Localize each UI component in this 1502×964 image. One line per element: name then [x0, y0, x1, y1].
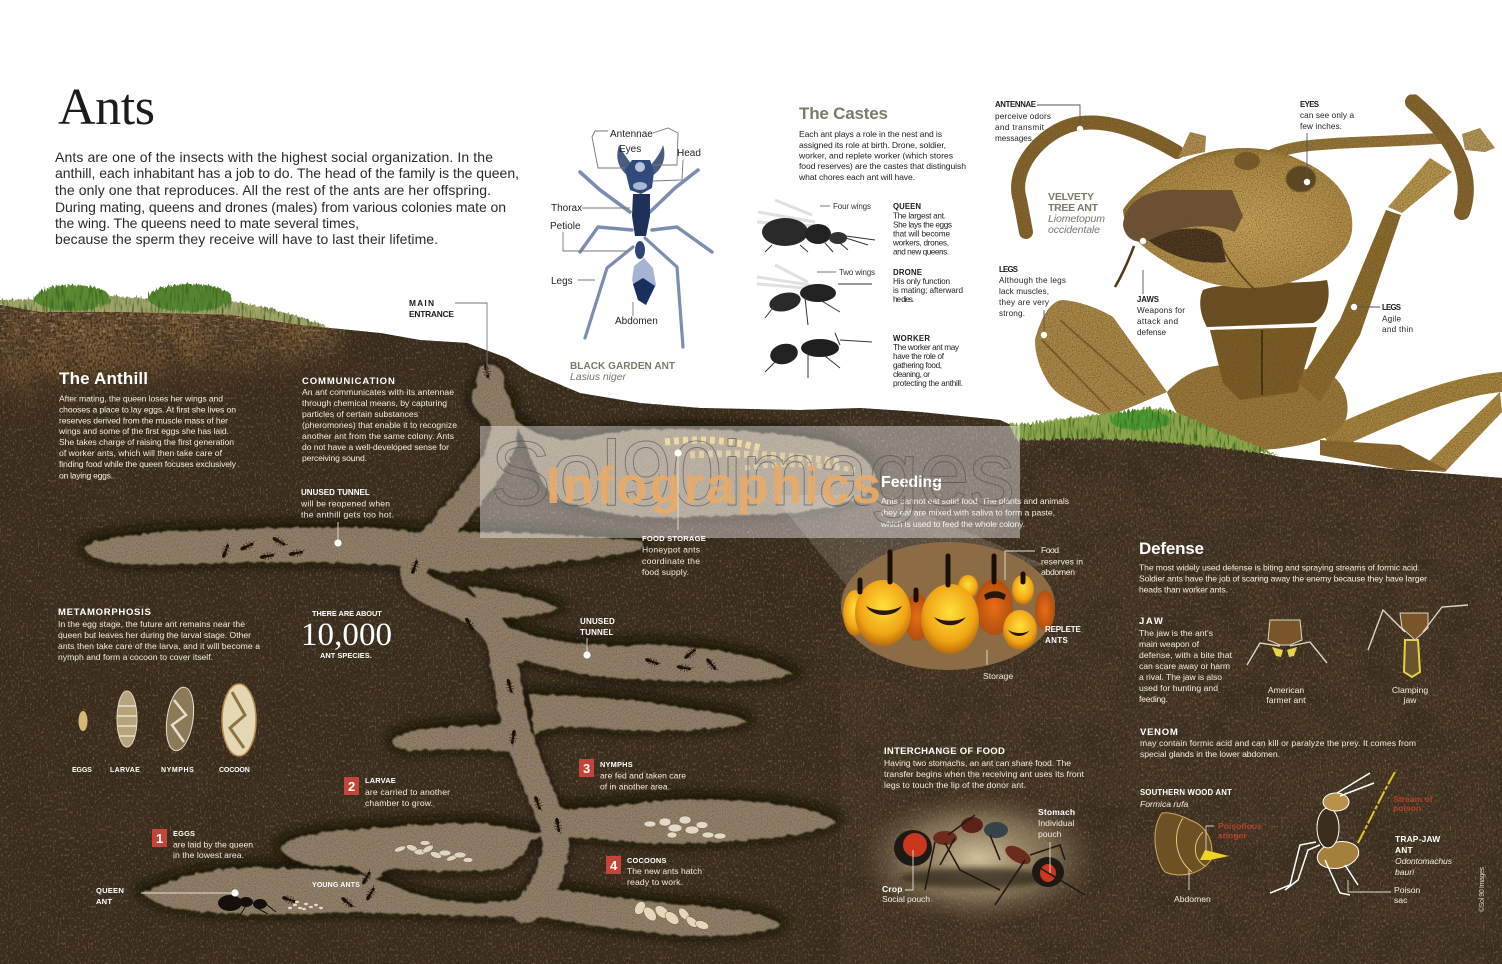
- caste labels: The worker ant may: [893, 343, 960, 352]
- raised leg: [1298, 210, 1401, 402]
- clamping jaw head: [1368, 605, 1468, 705]
- food storage label: coordinate the: [642, 556, 700, 566]
- big ant annotations: VELVETY: [1048, 191, 1094, 203]
- the anthill text: [58, 369, 237, 480]
- the anthill text: reserves derived from the muscle mass of her: [59, 416, 228, 426]
- step 3 nymphs: are fed and taken care: [600, 770, 686, 780]
- step 1 eggs: EGGS: [173, 829, 195, 838]
- ant part labels: Antennae: [610, 129, 653, 140]
- black garden ant caption: BLACK GARDEN ANT: [570, 361, 675, 372]
- replete ants labels: Storage: [983, 671, 1013, 681]
- big ant annotations: LEGS: [1382, 303, 1401, 312]
- caste labels: workers, drones,: [892, 238, 949, 248]
- crop and stomach labels: pouch: [1038, 829, 1062, 839]
- intro text: During mating, queens and drones (males) from various colonies mate on: [55, 199, 506, 215]
- venom text: VENOM: [1140, 727, 1178, 738]
- queen ant: [218, 895, 276, 915]
- southern wood ant: Poisonous: [1218, 821, 1262, 831]
- metamorphosis text: In the egg stage, the future ant remains near the: [58, 619, 245, 629]
- fine grain on tunnels: [0, 290, 1502, 964]
- step 1 eggs: are laid by the queen: [173, 840, 253, 850]
- 10,000 ant species stat: THERE ARE ABOUT: [312, 609, 382, 618]
- egg pile: [288, 901, 323, 910]
- ant heads: [860, 552, 1023, 600]
- big ant annotations: defense: [1137, 328, 1166, 337]
- young ants label: YOUNG ANTS: [312, 882, 360, 889]
- queen ant label: ANT: [96, 897, 112, 906]
- stage labels: COCOON: [219, 767, 250, 774]
- step 3 nymphs: [579, 759, 686, 792]
- replete ants close-up: [841, 542, 1055, 670]
- food storage pin: [674, 449, 682, 530]
- black garden ant caption: [570, 361, 675, 383]
- zoom wedge to replete ants: [772, 495, 1045, 590]
- nymph pile: [644, 816, 726, 839]
- caste labels: Four wings: [833, 202, 871, 211]
- folded foreleg: [1035, 300, 1167, 417]
- ant callout lines: [563, 128, 683, 316]
- ant part labels: Thorax: [551, 203, 582, 214]
- interchange of food text: transfer begins when the receiving ant uses its front: [884, 769, 1085, 779]
- caste labels: and new queens.: [893, 248, 949, 256]
- jaw text: JAW: [1139, 616, 1163, 627]
- big ant annotations: attack and: [1137, 317, 1178, 326]
- left ant: [894, 815, 1000, 890]
- right ant: [984, 822, 1085, 905]
- metamorphosis stages: [72, 684, 256, 774]
- 10,000 ant species stat: 10,000: [301, 617, 392, 653]
- jaw text: The jaw is the ant's: [1139, 628, 1213, 638]
- interchange of food photo: [853, 790, 1103, 926]
- replete ants labels: [983, 545, 1083, 681]
- communication text: An ant communicates with its antennae: [302, 387, 454, 397]
- big ant annotations: Agile: [1382, 314, 1401, 324]
- stinger label: [1206, 826, 1214, 852]
- communication text: do not have a well-developed sense for: [302, 442, 449, 452]
- crop and stomach labels: Social pouch: [882, 894, 930, 904]
- step 4 cocoons: ready to work.: [627, 877, 683, 887]
- main entrance label: MAIN: [409, 298, 434, 308]
- step 4 cocoons: COCOONS: [627, 856, 667, 865]
- step 2 larvae: 2: [348, 779, 355, 794]
- big ant annotations: LEGS: [999, 265, 1018, 274]
- main entrance label: ENTRANCE: [409, 309, 454, 319]
- intro text: [55, 149, 519, 247]
- stage labels: LARVAE: [110, 767, 140, 774]
- step 1 eggs: in the lowest area.: [173, 850, 244, 860]
- jaw text: [1139, 616, 1233, 704]
- american farmer ant head: farmer ant: [1266, 695, 1306, 705]
- nymph: [163, 686, 197, 752]
- caste labels: he dies.: [893, 295, 914, 304]
- head: [1123, 148, 1352, 288]
- larvae pile: [394, 840, 473, 862]
- queen ant photo: [757, 200, 875, 252]
- ant legs: [580, 170, 712, 347]
- grass: right patch: [1010, 408, 1278, 455]
- big ant annotations: [995, 100, 1413, 338]
- southern wood ant: Formica rufa: [1140, 799, 1188, 809]
- big ant annotations: EYES: [1300, 100, 1319, 109]
- venom text: special glands in the lower abdomen.: [1140, 749, 1280, 759]
- step 2 larvae: are carried to another: [365, 787, 450, 797]
- abdomen drawing: [1155, 813, 1229, 875]
- big ant annotations: and transmit: [995, 123, 1045, 132]
- soil ground with tunnels: [0, 290, 1502, 964]
- unused tunnel 2 label: TUNNEL: [580, 628, 614, 637]
- stage labels: NYMPHS: [161, 767, 194, 774]
- big ant annotations: occidentale: [1048, 224, 1100, 236]
- jaw text: can scare away or harm: [1139, 661, 1230, 671]
- step 1 eggs: 1: [156, 831, 163, 846]
- trap-jaw ant drawing: [1270, 770, 1396, 895]
- big ant annotations: ANTENNAE: [995, 100, 1036, 109]
- ant part labels: [550, 129, 701, 327]
- metamorphosis text: nymph and form a cocoon to cover itself.: [58, 652, 213, 662]
- dark bands: [866, 591, 1030, 636]
- body: [1315, 838, 1361, 872]
- communication text: [302, 376, 457, 463]
- the castes text: food reserves) are the castes that distinguish: [799, 161, 966, 171]
- watermark orange wordmark: Infographics: [546, 457, 881, 515]
- step 2 larvae: chamber to grow.: [365, 798, 433, 808]
- ant part labels: Petiole: [550, 221, 581, 232]
- the castes text: assigned its role at birth. Drone, soldier,: [799, 140, 946, 150]
- the anthill text: The Anthill: [59, 369, 148, 388]
- feeding text: Feeding: [881, 474, 942, 491]
- communication text: another ant from the same colony. Ants: [302, 431, 454, 441]
- communication text: particles of certain substances: [302, 409, 418, 419]
- interchange of food text: INTERCHANGE OF FOOD: [884, 746, 1005, 757]
- soil mottling: [0, 290, 1502, 964]
- ant part labels: Eyes: [619, 144, 641, 155]
- 10,000 ant species stat: ANT SPECIES.: [320, 651, 372, 660]
- communication text: perceiving sound.: [302, 453, 367, 463]
- caste labels: Two wings: [839, 268, 875, 277]
- crop and stomach labels: Stomach: [1038, 807, 1075, 817]
- big ant annotations: Weapons for: [1137, 306, 1185, 315]
- defense text: heads than worker ants.: [1139, 585, 1228, 595]
- clamping jaw head: jaw: [1403, 695, 1417, 705]
- the anthill text: wings and some of the first eggs she has laid.: [58, 426, 229, 436]
- stream of poison label: [1393, 794, 1433, 813]
- food storage flecks: [665, 440, 855, 470]
- southern wood ant: Abdomen: [1174, 894, 1211, 904]
- stage labels: [72, 767, 250, 774]
- straw in topsoil: [0, 305, 345, 375]
- big ant annotations: and thin: [1382, 325, 1413, 334]
- caste labels: is mating; afterward: [893, 286, 963, 295]
- hind legs: [1320, 372, 1502, 472]
- trap-jaw ant label: TRAP-JAW: [1395, 834, 1440, 844]
- trap-jaw ant label: ANT: [1395, 845, 1413, 855]
- jaw text: a rival. The jaw is also: [1139, 672, 1222, 682]
- intro text: anthill, each inhabitant has a job to do. The head of the family is the queen,: [55, 165, 519, 181]
- the anthill text: She takes charge of raising the first generation: [59, 437, 234, 447]
- big ant annotations: Liometopum: [1048, 213, 1105, 225]
- southern wood ant: [1140, 788, 1262, 904]
- small ants in tunnels: [219, 363, 720, 911]
- feeding text: Ants cannot eat solid food. The plants and animals: [881, 496, 1069, 506]
- step 3 nymphs: NYMPHS: [600, 760, 633, 769]
- the anthill text: After mating, the queen loses her wings and: [59, 394, 223, 404]
- watermark outlined logo: Sol90images: [490, 423, 1015, 525]
- stream of poison label: Stream of: [1393, 794, 1433, 804]
- jaw text: defense, with a bite that: [1139, 650, 1233, 660]
- intro text: the wing. The queens need to mate several times,: [55, 215, 359, 231]
- poison sac label: sac: [1394, 895, 1408, 905]
- metamorphosis text: ants then take care of the larva, and it will become a: [58, 641, 260, 651]
- interchange of food text: Having two stomachs, an ant can share food. The: [884, 758, 1071, 768]
- caste labels: protecting the anthill.: [893, 379, 963, 388]
- glow: [853, 790, 1103, 926]
- ear spike: [1178, 132, 1206, 158]
- feeding text: [880, 474, 1069, 529]
- jaw text: feeding.: [1139, 694, 1168, 704]
- interchange of food text: legs to touch the lip of the donor ant.: [884, 780, 1026, 790]
- palp: [1115, 246, 1134, 287]
- soil dark grain: [0, 290, 1502, 964]
- intro text: Ants are one of the insects with the highest social organization. In the: [55, 149, 493, 165]
- step 1 eggs: [152, 829, 253, 860]
- big ant annotations: lack muscles,: [999, 287, 1049, 296]
- crop and stomach labels: [882, 807, 1075, 904]
- stage labels: EGGS: [72, 767, 92, 774]
- the castes text: what chores each ant will have.: [798, 172, 915, 182]
- communication text: COMMUNICATION: [302, 376, 395, 387]
- intro text: the only one that reproduces. All the rest of the ants are her offspring.: [55, 182, 491, 198]
- venom text: [1140, 727, 1416, 759]
- stream of poison: [1358, 770, 1396, 843]
- ant part labels: Legs: [551, 276, 573, 287]
- big ant annotations: can see only a: [1300, 111, 1354, 120]
- antenna socket: [1234, 152, 1260, 170]
- the castes text: worker, and replete worker (which stores: [798, 150, 953, 160]
- black garden ant caption: Lasius niger: [570, 371, 626, 383]
- step 2 larvae: LARVAE: [365, 776, 396, 785]
- replete ants labels: reserves in: [1041, 556, 1083, 566]
- ant mandibles: [617, 145, 664, 176]
- step 4 cocoons: The new ants hatch: [627, 866, 702, 876]
- defense text: [1139, 539, 1427, 595]
- compound eye: [1286, 166, 1316, 192]
- southern wood ant: stinger: [1218, 830, 1247, 840]
- american farmer ant head: [1247, 620, 1327, 705]
- lower jaw: [1145, 228, 1226, 263]
- defense text: Defense: [1139, 539, 1204, 558]
- caste labels: WORKER: [893, 334, 930, 343]
- feeding text: which is used to feed the whole colony.: [880, 519, 1025, 529]
- caste labels: QUEEN: [893, 202, 921, 211]
- big ant annotations: perceive odors: [995, 112, 1051, 121]
- trap-jaw ant label: [1395, 834, 1453, 877]
- unused tunnel label: UNUSED TUNNEL: [301, 488, 370, 497]
- tunnel shadow: [85, 376, 874, 934]
- big ant annotations: TREE ANT: [1048, 202, 1099, 214]
- step 3 nymphs: 3: [583, 761, 590, 776]
- big ant annotations: JAWS: [1137, 295, 1159, 304]
- ant part labels: Abdomen: [615, 316, 658, 327]
- larva: [117, 691, 137, 747]
- stream of poison label: poison: [1393, 803, 1421, 813]
- reddish topsoil: [0, 300, 340, 395]
- lower body: [1167, 365, 1348, 452]
- lighter right soil: [840, 420, 1502, 964]
- egg: [78, 711, 88, 731]
- step 4 cocoons: [606, 856, 702, 887]
- giant velvety tree ant: [1018, 102, 1502, 472]
- caste labels: His only function: [893, 277, 950, 286]
- replete ants labels: REPLETE: [1045, 625, 1081, 634]
- chamber: [841, 542, 1055, 670]
- feeding text: they eat are mixed with saliva to form a paste,: [881, 508, 1055, 518]
- communication text: through chemical means, by capturing: [302, 398, 447, 408]
- antennae: [1018, 102, 1466, 232]
- watermark panel: [480, 423, 1020, 538]
- unused tunnel label: [300, 488, 394, 547]
- tunnel network: [85, 378, 874, 936]
- honeypot abdomens: [843, 575, 1055, 654]
- clamping jaw head: Clamping: [1392, 685, 1428, 695]
- caste labels: have the role of: [893, 352, 945, 361]
- black garden ant diagram: [550, 128, 712, 347]
- american farmer ant head: American: [1268, 685, 1304, 695]
- big ant annotations: few inches.: [1300, 122, 1342, 131]
- food storage label: FOOD STORAGE: [642, 534, 706, 543]
- big ant annotations: messages.: [995, 134, 1034, 143]
- defense text: Soldier ants have the job of scaring away the enemy because they have larger: [1139, 574, 1427, 584]
- food storage label: food supply.: [642, 567, 689, 577]
- cocoon pile: [632, 899, 710, 931]
- defense text: The most widely used defense is biting and spraying streams of formic acid.: [1139, 563, 1420, 573]
- the castes text: Each ant plays a role in the nest and is: [799, 129, 942, 139]
- big ant annotations: strong.: [999, 309, 1025, 318]
- ant body: [625, 160, 656, 305]
- replete ants labels: ANTS: [1045, 636, 1068, 645]
- jaw text: used for hunting and: [1139, 683, 1218, 693]
- crop and stomach labels: Crop: [882, 884, 903, 894]
- step 2 larvae: [344, 776, 450, 808]
- venom text: may contain formic acid and can kill or paralyze the prey. It comes from: [1140, 738, 1416, 748]
- big ant annotations: Although the legs: [999, 276, 1066, 285]
- the castes text: [798, 129, 966, 182]
- caste labels: cleaning, or: [893, 370, 930, 379]
- caste labels: that will become: [893, 230, 950, 238]
- crop and stomach labels: Individual: [1038, 818, 1074, 828]
- caste labels: The largest ant.: [893, 212, 946, 220]
- metamorphosis text: queen but leaves her during the larval stage. Other: [58, 630, 251, 640]
- queen ant label: QUEEN: [96, 886, 124, 895]
- metamorphosis text: [58, 607, 260, 662]
- title: Ants: [58, 79, 155, 136]
- communication text: (pheromones) that enable it to recognize: [302, 420, 457, 430]
- soil light grain: [0, 290, 1502, 964]
- poison sac label: [1348, 880, 1420, 905]
- shadow: [900, 868, 1050, 888]
- thorax segments: [1210, 327, 1317, 400]
- copyright: ©Sol 90 Images: [1478, 866, 1486, 912]
- step 3 nymphs: of in another area.: [600, 782, 670, 792]
- jaw text: main weapon of: [1139, 639, 1200, 649]
- main entrance label: [409, 298, 487, 375]
- unused tunnel 2 label: [580, 617, 615, 659]
- worker ant photo: [765, 333, 872, 378]
- unused tunnel label: will be reopened when: [300, 498, 390, 508]
- caste labels: [817, 202, 963, 388]
- drone ant photo: [757, 265, 872, 325]
- metamorphosis text: METAMORPHOSIS: [58, 607, 151, 618]
- unused tunnel label: the anthill gets too hot.: [301, 510, 394, 520]
- step 4 cocoons: 4: [610, 858, 618, 873]
- replete ants labels: Food: [1041, 545, 1059, 555]
- caste labels: gathering food,: [893, 361, 942, 370]
- soil base: [0, 290, 1502, 964]
- ant part labels: Head: [677, 148, 701, 159]
- poison sac label: Poison: [1394, 885, 1420, 895]
- grass: left tufts: [0, 284, 325, 338]
- the anthill text: chooses a place to lay eggs. At first she lives on: [59, 404, 236, 414]
- trap-jaw ant label: bauri: [1395, 867, 1415, 877]
- trap-jaw ant label: Odontomachus: [1395, 856, 1453, 866]
- unused tunnel 2 label: UNUSED: [580, 617, 615, 626]
- the anthill text: on laying eggs.: [59, 470, 113, 480]
- big ant annotations: they are very: [999, 298, 1050, 307]
- the anthill text: finding food while the queen focuses exclusively: [59, 459, 237, 469]
- southern wood ant: SOUTHERN WOOD ANT: [1140, 788, 1232, 797]
- legs and antennae: [1270, 773, 1374, 895]
- the anthill text: of worker ants, which will then take care of: [59, 448, 223, 458]
- queen ant label: [96, 886, 239, 906]
- interchange of food text: [884, 746, 1085, 790]
- replete ants labels: abdomen: [1041, 567, 1075, 577]
- food storage label: Honeypot ants: [642, 544, 700, 554]
- the castes heading: The Castes: [799, 104, 888, 123]
- cocoon: [222, 684, 256, 756]
- caste labels: She lays the eggs: [893, 220, 952, 230]
- food storage label: [642, 534, 706, 577]
- caste labels: DRONE: [893, 268, 922, 277]
- intro text: because the sperm they receive will have to last their lifetime.: [55, 231, 438, 247]
- mandible: [1123, 190, 1243, 242]
